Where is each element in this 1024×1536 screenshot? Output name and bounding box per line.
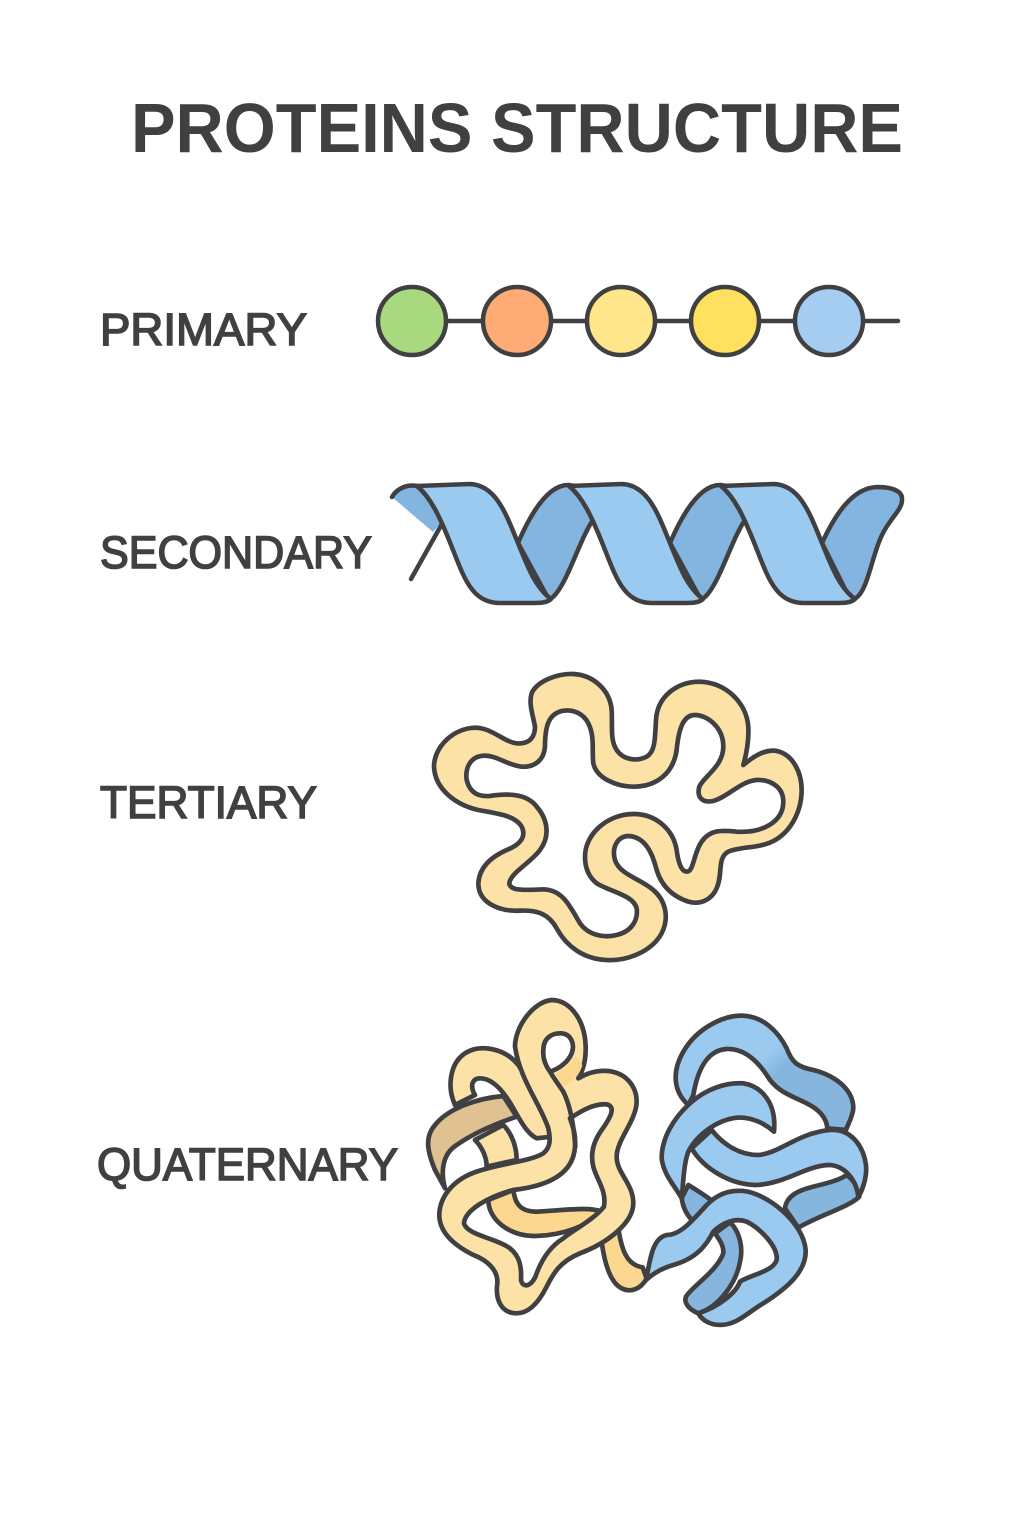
- label: tertiary: TERTIARY: [100, 777, 317, 828]
- secondary structure: alpha helix ribbon: [392, 484, 902, 603]
- label: quaternary: QUATERNARY: [97, 1139, 398, 1190]
- quaternary structure: blue subunit: [646, 1016, 866, 1325]
- tertiary structure: folded strand: [434, 674, 802, 960]
- title: PROTEINS STRUCTURE: [131, 89, 903, 167]
- label: primary: PRIMARY: [100, 304, 307, 355]
- primary structure: amino acid chain: [378, 287, 898, 355]
- label: secondary: SECONDARY: [100, 527, 372, 578]
- quaternary structure: yellow subunit: [428, 1000, 647, 1313]
